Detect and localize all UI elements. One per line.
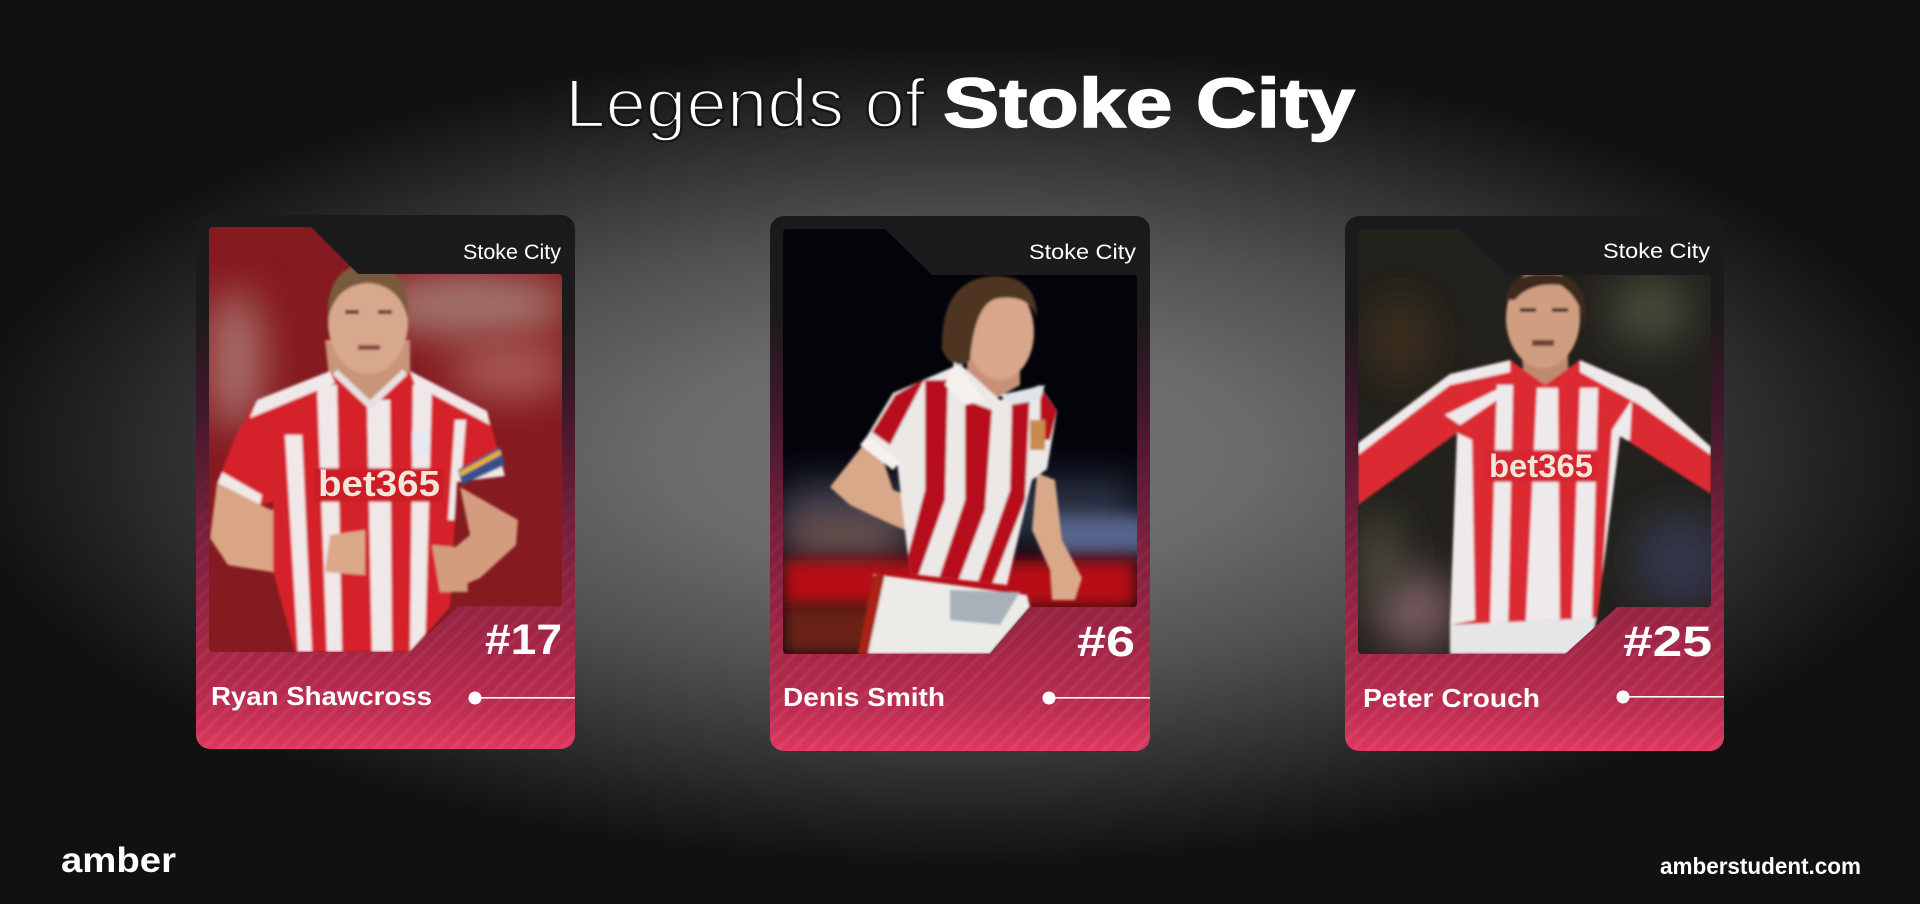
title	[565, 64, 1355, 142]
shirt number: #17	[485, 616, 562, 664]
website: amberstudent.com	[1660, 853, 1861, 879]
connector line with dot	[468, 692, 575, 704]
card diagonal texture	[1345, 610, 1724, 751]
logo: amber: amber	[61, 841, 176, 880]
card diagonal texture	[770, 610, 1150, 751]
player name: Peter Crouch	[1363, 683, 1540, 713]
card diagonal texture	[196, 610, 575, 749]
player photo	[1358, 229, 1730, 654]
club label: Stoke City	[1603, 240, 1711, 263]
connector line with dot	[1042, 692, 1150, 704]
sponsor: card 1: bet365	[318, 463, 440, 504]
card background	[770, 216, 1150, 751]
title light part: Legends of	[565, 65, 926, 142]
card background	[1345, 216, 1724, 751]
sponsor: card 3: bet365	[1489, 448, 1593, 484]
club label: Stoke City	[1029, 241, 1137, 264]
player photo	[783, 229, 1150, 655]
shirt number: #6	[1077, 618, 1135, 666]
player name: Denis Smith	[783, 682, 945, 712]
card: Denis Smith	[770, 216, 1150, 751]
shirt sponsor labels	[318, 448, 1593, 504]
shirt number: #25	[1623, 618, 1712, 666]
club label: Stoke City	[463, 241, 562, 264]
card: Peter Crouch	[1345, 216, 1730, 751]
connector line with dot	[1616, 690, 1724, 704]
card: Ryan Shawcross	[196, 215, 575, 749]
card background	[196, 215, 575, 749]
title bold part: Stoke City	[943, 64, 1355, 142]
player photo	[207, 227, 570, 652]
player name: Ryan Shawcross	[211, 681, 432, 711]
